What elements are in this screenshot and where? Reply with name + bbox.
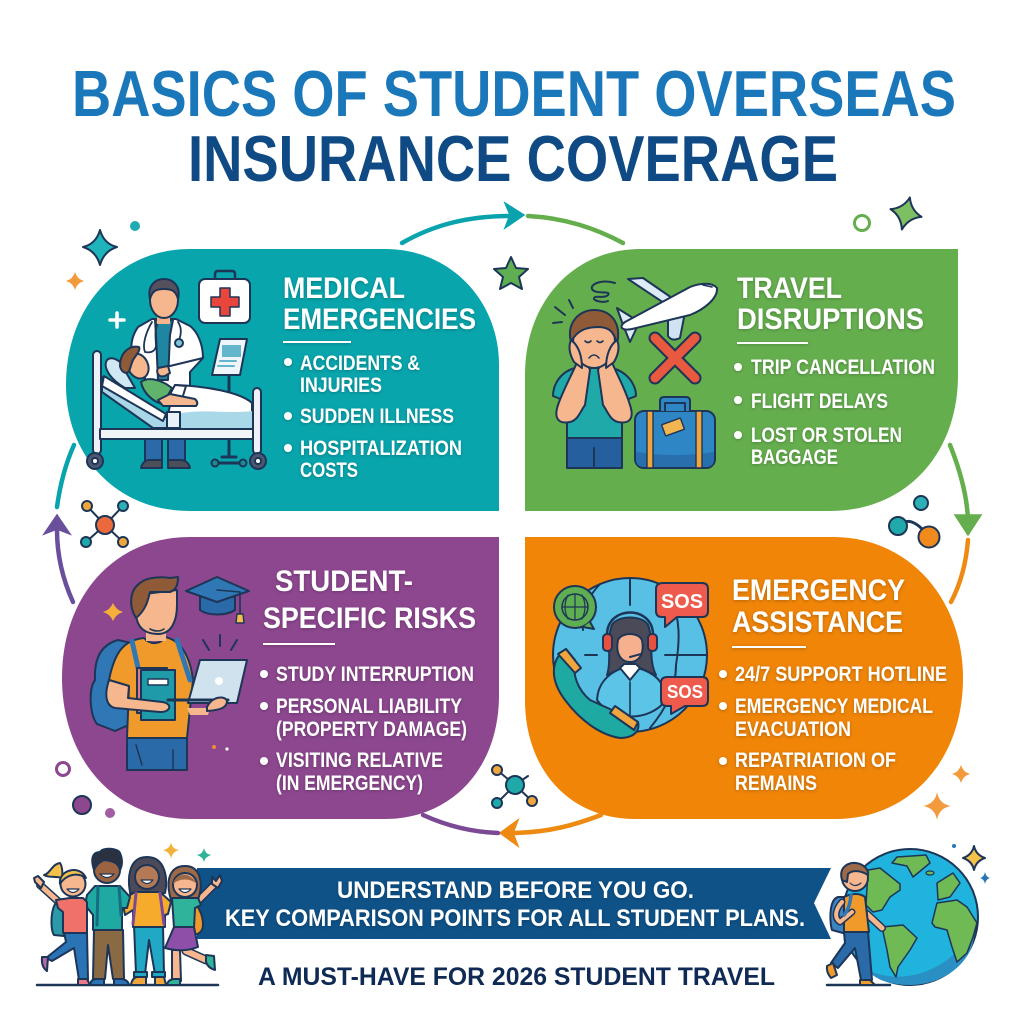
ribbon text: KEY COMPARISON POINTS FOR ALL STUDENT PLANS. — [225, 905, 805, 932]
text: travel heading and list: BAGGAGE — [751, 446, 838, 469]
icon: doctor and patient in hospital bed — [87, 279, 266, 469]
ribbon text: UNDERSTAND BEFORE YOU GO. — [337, 877, 694, 904]
text: emergency heading and list — [719, 574, 947, 795]
ribbon text — [225, 877, 805, 932]
text: travel heading and list: LOST OR STOLEN — [751, 424, 902, 447]
text: travel heading and list: TRAVEL — [737, 272, 842, 305]
cycle arrows — [44, 203, 981, 846]
text: emergency heading and list: REPATRIATION OF — [735, 749, 896, 772]
panel: emergency assistance — [525, 537, 963, 819]
title: INSURANCE COVERAGE — [188, 122, 838, 195]
text: emergency heading and list: ASSISTANCE — [732, 606, 903, 639]
title — [72, 57, 956, 195]
icon: student with backpack, books and laptop — [91, 577, 249, 770]
decorative stars, dots and molecules — [56, 194, 970, 820]
illustration: group of four students — [34, 842, 222, 985]
icon labels: SOS: SOS — [661, 591, 703, 613]
text: medical heading and list: ACCIDENTS & — [300, 352, 420, 375]
panel: medical emergencies — [66, 249, 499, 511]
text: student heading and list — [260, 565, 476, 795]
student 3: dark-haired girl — [122, 857, 171, 985]
text: medical heading and list: MEDICAL — [283, 272, 405, 305]
icon: globe with call-centre agent, phone and SOS bubbles — [553, 578, 708, 738]
text: medical heading and list: SUDDEN ILLNESS — [300, 405, 454, 428]
text: emergency heading and list: EVACUATION — [735, 718, 851, 741]
panel: travel disruptions — [525, 249, 958, 511]
text: emergency heading and list: EMERGENCY MEDICAL — [735, 695, 933, 718]
student 1: blonde girl — [34, 863, 90, 985]
text: medical heading and list: EMERGENCIES — [283, 303, 476, 336]
text: travel heading and list: DISRUPTIONS — [737, 303, 924, 336]
text: emergency heading and list: 24/7 SUPPORT HOTLINE — [735, 663, 947, 686]
icon: first aid kit — [199, 271, 250, 323]
student 2: boy in teal shirt — [85, 849, 130, 985]
text: medical heading and list: INJURIES — [300, 374, 382, 397]
student 4: brown-haired girl — [165, 866, 222, 985]
text: student heading and list: (IN EMERGENCY) — [276, 772, 423, 795]
illustration: student walking in front of globe — [827, 844, 990, 985]
text: travel heading and list — [734, 272, 935, 469]
panel: student-specific risks — [62, 537, 499, 819]
text: student heading and list: (PROPERTY DAMAGE) — [276, 718, 467, 741]
text: student heading and list: PERSONAL LIABILITY — [276, 695, 462, 718]
text: medical heading and list: HOSPITALIZATION — [300, 437, 462, 460]
text: student heading and list: STUDY INTERRUPTION — [276, 663, 474, 686]
text: emergency heading and list: REMAINS — [735, 772, 817, 795]
text: travel heading and list: TRIP CANCELLATION — [751, 356, 935, 379]
text: student heading and list: SPECIFIC RISKS — [263, 602, 476, 635]
icon labels: SOS — [661, 591, 703, 702]
text: medical heading and list: COSTS — [300, 459, 358, 482]
ribbon banner — [197, 868, 831, 939]
text: medical heading and list — [283, 272, 476, 482]
icon labels: SOS: SOS — [667, 682, 703, 702]
globe — [842, 849, 978, 985]
tagline: A MUST-HAVE FOR 2026 STUDENT TRAVEL — [258, 963, 775, 991]
text: travel heading and list: FLIGHT DELAYS — [751, 390, 888, 413]
text: emergency heading and list: EMERGENCY — [732, 574, 905, 607]
text: student heading and list: VISITING RELATIVE — [276, 749, 443, 772]
text: student heading and list: STUDENT- — [275, 565, 413, 598]
icon: worried student with cancelled flight — [553, 278, 717, 468]
